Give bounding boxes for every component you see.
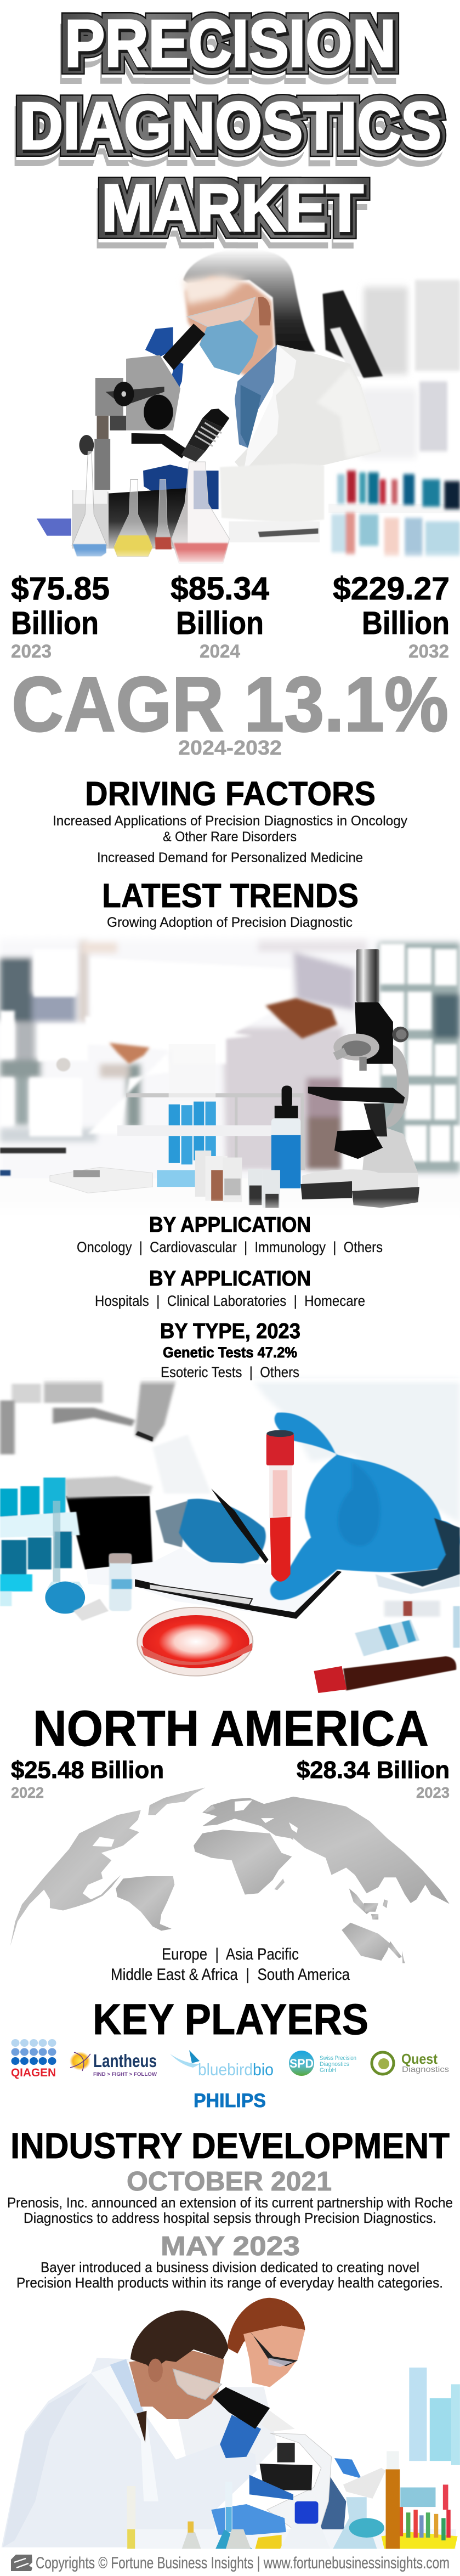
title: MARKET [101, 171, 364, 245]
logo: Lantheus: Lantheus [93, 2051, 157, 2071]
footer logo [11, 2555, 32, 2571]
development: May 2023: Bayer introduced a business division dedicated to creating novel [41, 2259, 419, 2275]
logo: Quest Diagnostics [372, 2051, 449, 2074]
heading: by application 2: BY APPLICATION [149, 1267, 311, 1290]
driving factors text: & Other Rare Disorders [163, 829, 297, 845]
title: MARKET [101, 174, 364, 249]
logo: Quest Diagnostics: Diagnostics [402, 2065, 449, 2074]
stat: 2024 value: Billion [176, 605, 264, 641]
photo: two scientists at microscope [2, 2298, 460, 2549]
logo: bluebird bio: bluebird [198, 2060, 253, 2079]
region: 2023 value [297, 1757, 450, 1801]
application list: Oncology | Cardiovascular | Immunology | Others [77, 1239, 383, 1255]
title: MARKET [101, 171, 364, 245]
world map [10, 1787, 450, 1963]
other regions [111, 1945, 350, 1984]
stat: 2032 value: $229.27 [333, 571, 450, 607]
other regions: Europe | Asia Pacific [162, 1945, 299, 1963]
region: 2023 value: $28.34 Billion [297, 1757, 450, 1784]
logo: Swiss Precision Diagnostics: Swiss Precision [320, 2055, 356, 2062]
flasks and glassware [37, 451, 229, 563]
logo: Qiagen [11, 2039, 56, 2079]
stat: 2023 value: 2023 [11, 641, 52, 662]
test tubes [328, 471, 460, 556]
region: 2022 value [11, 1757, 164, 1801]
logo: Swiss Precision Diagnostics [289, 2051, 356, 2076]
latest trends text: Growing Adoption of Precision Diagnostic [107, 915, 353, 930]
photo: lab bench with microscope [0, 932, 460, 1218]
title: MARKET [99, 181, 361, 256]
logo: bluebird bio [170, 2050, 274, 2079]
logo: bluebird bio: bio [253, 2060, 274, 2079]
region: 2023 value: 2023 [416, 1784, 450, 1801]
logo: Swiss Precision Diagnostics: SPD [289, 2057, 314, 2070]
region: 2022 value: 2022 [11, 1784, 44, 1801]
logo: Lantheus: FIND > FIGHT > FOLLOW [93, 2071, 157, 2077]
stat: 2024 value [171, 571, 269, 662]
stat: 2032 value [333, 571, 450, 662]
driving factors text [53, 813, 407, 865]
region: 2022 value: $25.48 Billion [11, 1757, 164, 1784]
title: PRECISION [65, 6, 396, 81]
title: PRECISION [65, 10, 396, 84]
development: October 2021 [7, 2167, 453, 2226]
stat: 2023 value: Billion [11, 605, 99, 641]
microscope [72, 324, 229, 548]
logo: Lantheus [70, 2051, 157, 2077]
dropper bottle and vials [195, 1085, 300, 1208]
stat: 2024 value: 2024 [200, 641, 240, 662]
CAGR figure: 2024-2032 [178, 737, 282, 759]
type highlight: Genetic Tests 47.2% [163, 1344, 297, 1361]
blurred background [0, 935, 460, 1181]
title: MARKET [103, 173, 365, 247]
title: PRECISION [63, 16, 394, 91]
title: PRECISION [66, 8, 397, 83]
title: PRECISION [65, 6, 396, 81]
development: October 2021: Diagnostics to address hospital sepsis through Precision Diagnostics. [24, 2210, 436, 2226]
type list: Esoteric Tests | Others [161, 1364, 299, 1380]
microscope [300, 949, 419, 1208]
development: May 2023: Precision Health products within its range of everyday health categories. [16, 2274, 443, 2291]
heading: key players: KEY PLAYERS [93, 1995, 368, 2043]
stat: 2024 value: $85.34 [171, 571, 269, 607]
end-user list: Hospitals | Clinical Laboratories | Homecare [95, 1293, 365, 1309]
heading: driving factors: DRIVING FACTORS [85, 775, 376, 812]
driving factors text: Increased Demand for Personalized Medicine [97, 850, 363, 865]
tube rack [50, 1044, 305, 1193]
logo: Swiss Precision Diagnostics: Diagnostics [320, 2061, 349, 2068]
logo: Swiss Precision Diagnostics: GmbH [320, 2067, 336, 2074]
logo: Philips: PHILIPS [194, 2090, 266, 2111]
logo: Qiagen: QIAGEN [11, 2067, 56, 2079]
development: October 2021: OCTOBER 2021 [127, 2167, 332, 2196]
other regions: Middle East & Africa | South America [111, 1966, 350, 1984]
photo: gloved hand holding blood tube [0, 1378, 460, 1693]
title: MARKET [101, 171, 364, 245]
driving factors text: Increased Applications of Precision Diagnostics in Oncology [53, 813, 407, 829]
stat: 2032 value: 2032 [408, 641, 449, 662]
heading: north america: NORTH AMERICA [33, 1701, 429, 1757]
photo: scientist with microscope [0, 249, 460, 567]
title [17, 6, 443, 256]
stat: 2032 value: Billion [362, 605, 450, 641]
development: May 2023: MAY 2023 [161, 2232, 300, 2261]
scientist [182, 249, 381, 542]
shelves [322, 280, 460, 458]
heading: latest trends: LATEST TRENDS [102, 877, 359, 914]
stat: 2023 value [11, 571, 110, 662]
heading: by application: BY APPLICATION [149, 1213, 311, 1237]
heading: by type: BY TYPE, 2023 [160, 1320, 300, 1343]
stat: 2023 value: $75.85 [11, 571, 110, 607]
logo: Quest Diagnostics: Quest [401, 2051, 438, 2067]
development: May 2023 [16, 2232, 443, 2291]
title: PRECISION [65, 6, 396, 81]
